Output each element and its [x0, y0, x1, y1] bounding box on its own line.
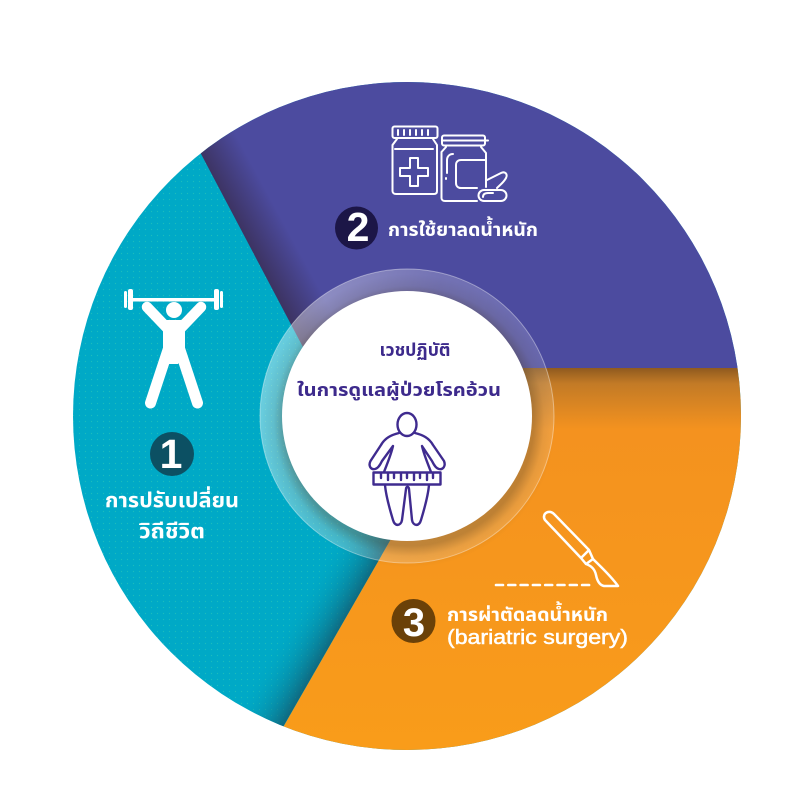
text: surgery label line 1: การผ่าตัดลดน้ำหนัก [447, 601, 608, 626]
heading: center title line 1: เวชปฏิบัติ [380, 340, 450, 360]
icon: medicine bottles and pills [392, 126, 507, 201]
icon: scalpel [496, 512, 618, 586]
center shadow [262, 274, 556, 568]
dashed incision line [496, 584, 592, 586]
heading: center title line 2: ในการดูแลผู้ป่วยโรคอ้วน [297, 380, 501, 401]
icon: number 1 badge [150, 431, 194, 477]
icon: number 3 badge [392, 599, 436, 645]
icon: number 2 badge [335, 204, 378, 250]
text: lifestyle label line 1: การปรับเปลี่ยน [105, 486, 239, 512]
center white circle [282, 291, 532, 541]
icon: number 2 badge: 2 [347, 204, 369, 250]
icon: number 1 badge: 1 [160, 431, 182, 477]
center ring [260, 269, 554, 563]
panel: outer circle [73, 82, 741, 750]
icon: number 3 badge: 3 [403, 601, 425, 645]
text: medication label: การใช้ยาลดน้ำหนัก [388, 216, 538, 241]
text: surgery label line 2: (bariatric surgery) [447, 627, 628, 649]
panel: purple segment medication [200, 82, 738, 368]
icon: obese person with measuring tape [370, 413, 445, 525]
panel: teal segment lifestyle [60, 70, 760, 770]
panel: orange segment surgery [284, 368, 741, 750]
icon: weightlifter [124, 289, 223, 403]
text: lifestyle label line 2: วิถีชีวิต [139, 521, 205, 543]
